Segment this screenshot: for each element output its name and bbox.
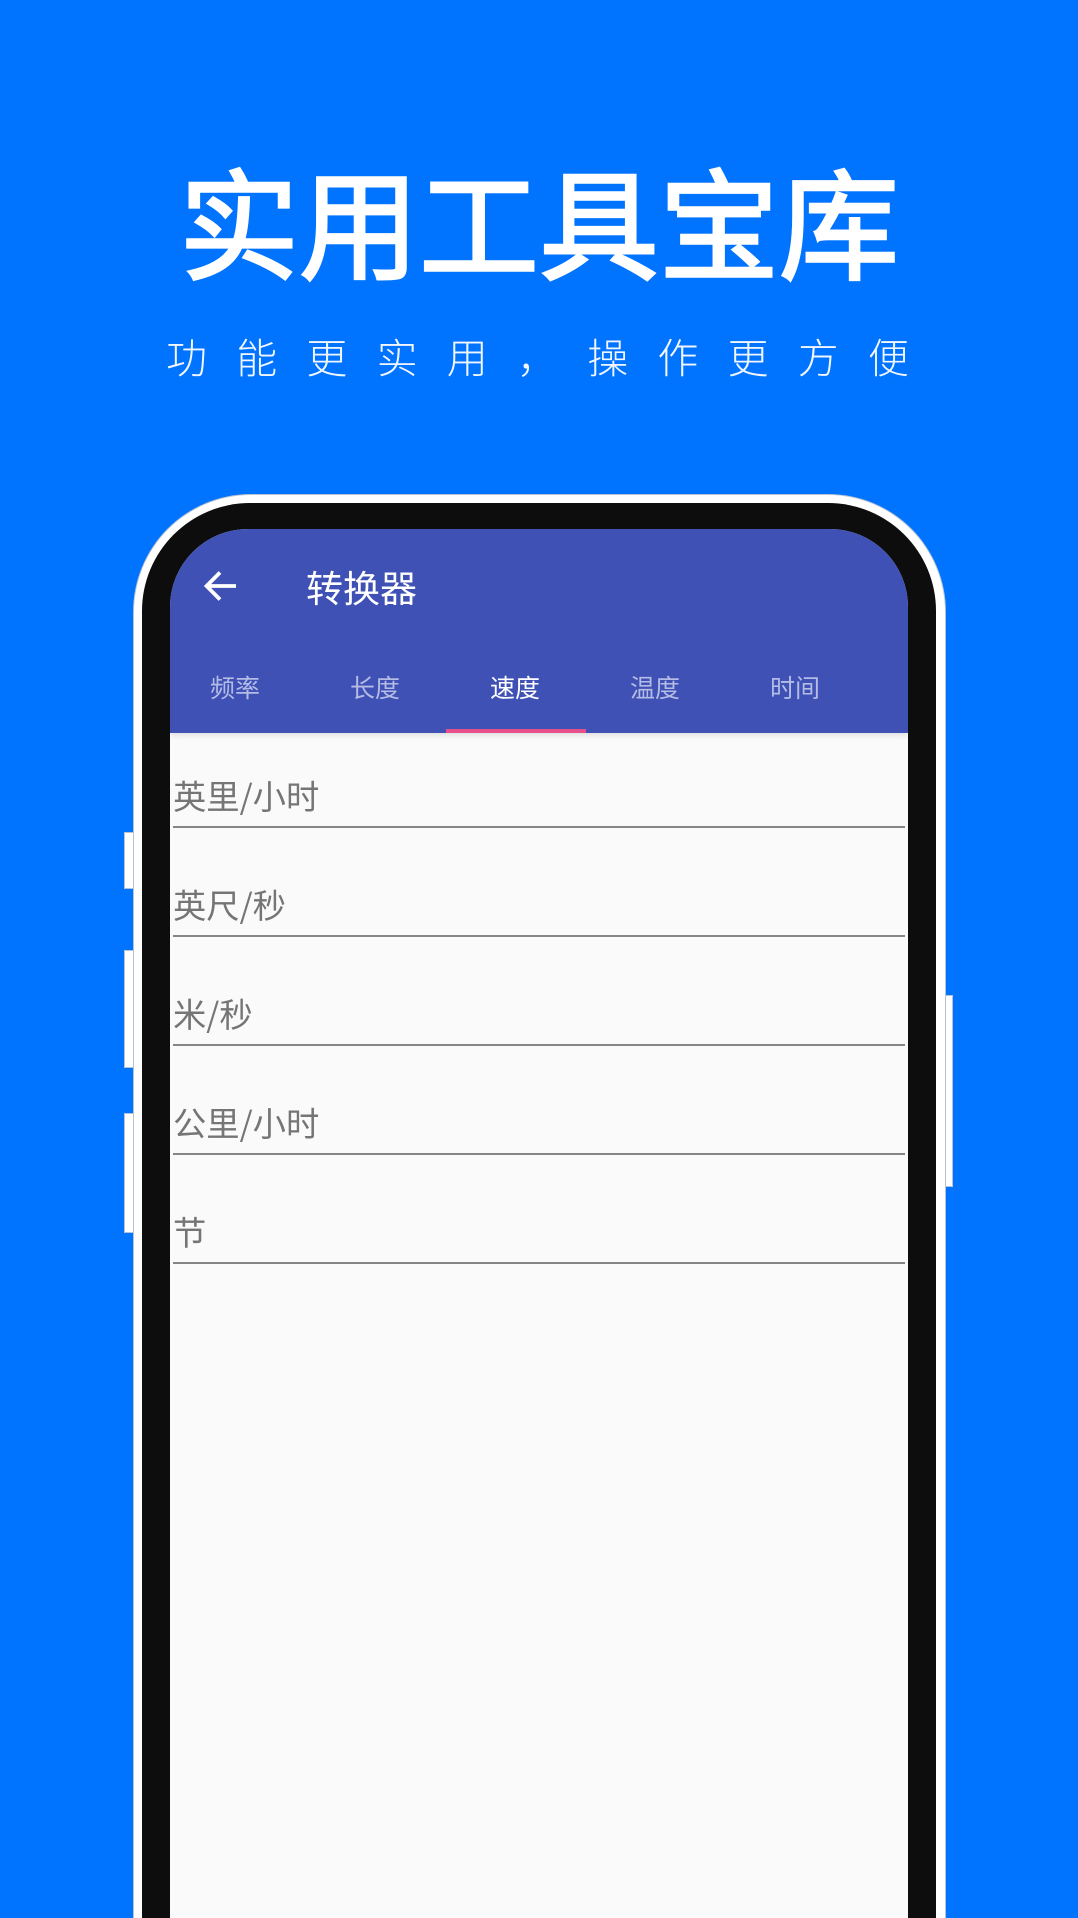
right side button	[939, 995, 953, 1187]
field label: knots: 节	[173, 1206, 206, 1255]
icon: back arrow	[204, 571, 236, 601]
field underline	[173, 1044, 905, 1046]
field underline	[173, 935, 905, 937]
subtitle: 功能更实用，操作更方便	[166, 325, 938, 385]
title: 实用工具宝库	[179, 131, 899, 305]
phone mockup	[124, 494, 953, 1918]
field label: miles per hour: 英里/小时	[173, 770, 319, 819]
field underline	[173, 1153, 905, 1155]
tab: temperature: 温度	[630, 669, 680, 705]
tab: frequency: 频率	[210, 669, 260, 705]
tab: time: 时间	[770, 669, 820, 705]
field underline	[173, 826, 905, 828]
app bar	[170, 529, 908, 733]
field label: km per hour: 公里/小时	[173, 1097, 319, 1146]
left side button: middle	[124, 950, 138, 1068]
phone white frame	[133, 494, 946, 1918]
phone black bezel	[142, 503, 936, 1918]
phone screen	[170, 529, 908, 1918]
field underline	[173, 1262, 905, 1264]
tab: length: 长度	[350, 669, 400, 705]
left side button: bottom	[124, 1113, 138, 1233]
field label: metres per second: 米/秒	[173, 988, 253, 1037]
field label: feet per second: 英尺/秒	[173, 879, 286, 928]
active tab indicator	[446, 729, 586, 733]
app title: 转换器	[306, 559, 417, 613]
left side button: top	[124, 832, 138, 889]
tab: speed active: 速度	[490, 669, 540, 705]
